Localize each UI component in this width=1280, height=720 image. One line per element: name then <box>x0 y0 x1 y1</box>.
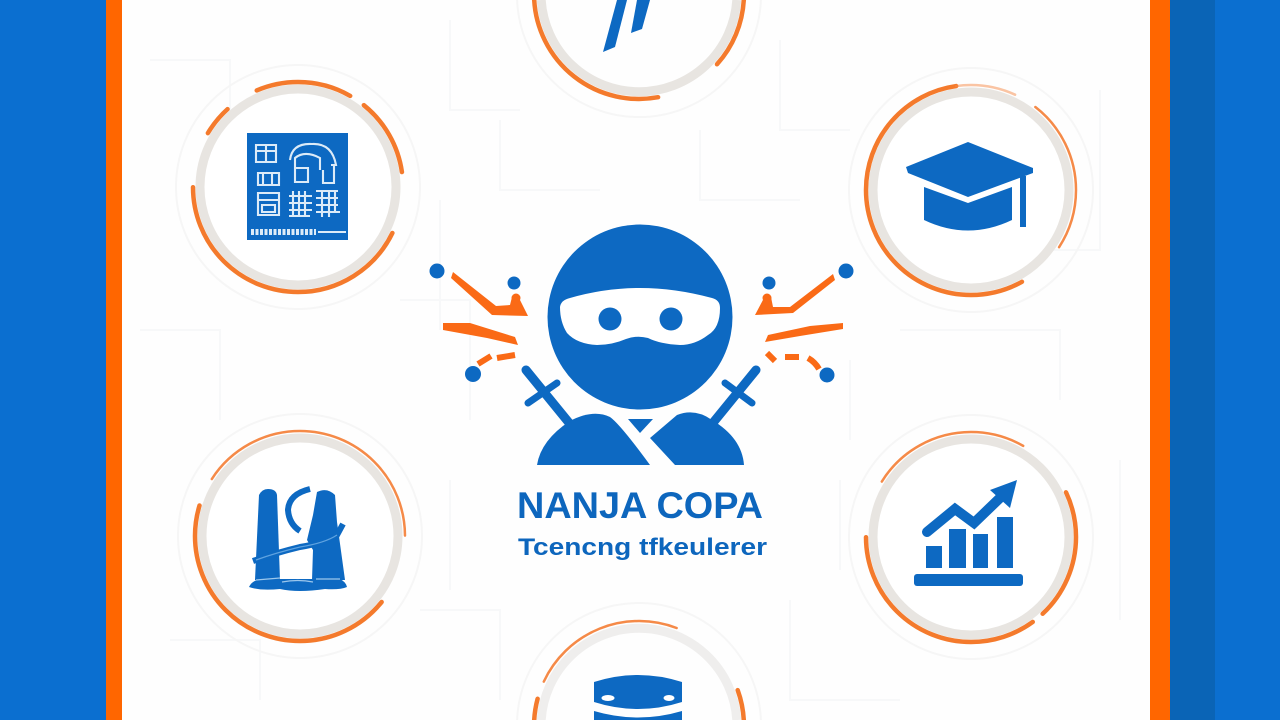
title: NANJA COPA <box>517 485 763 526</box>
ninja mask opening <box>560 288 720 345</box>
right circuit sparks <box>755 264 854 382</box>
icon: twin pillars with ribbon <box>249 489 347 591</box>
ninja eyes <box>598 308 682 330</box>
badge: top-left circle with blueprint square <box>176 65 420 309</box>
ninja head <box>548 224 732 410</box>
badge: top circle with slanted bars <box>517 0 761 117</box>
central ninja mascot <box>526 224 756 465</box>
icon: graduation cap <box>906 142 1033 230</box>
icon: slanted bars <box>603 0 650 52</box>
icon: database stack <box>594 675 682 720</box>
badge: top-right circle with graduation cap <box>849 68 1093 312</box>
badge: bottom-right circle with growth chart <box>849 415 1093 659</box>
ninja swords <box>526 370 756 424</box>
subtitle: Tcencng tfkeulerer <box>518 534 767 561</box>
icon: rising bar chart with arrow <box>914 480 1023 586</box>
ninja shoulders <box>537 412 744 465</box>
badge: bottom-left circle with twin pillars <box>178 414 422 658</box>
icon: blue blueprint square <box>247 133 348 240</box>
left circuit sparks <box>430 264 528 382</box>
badge: bottom circle with database <box>517 603 761 720</box>
